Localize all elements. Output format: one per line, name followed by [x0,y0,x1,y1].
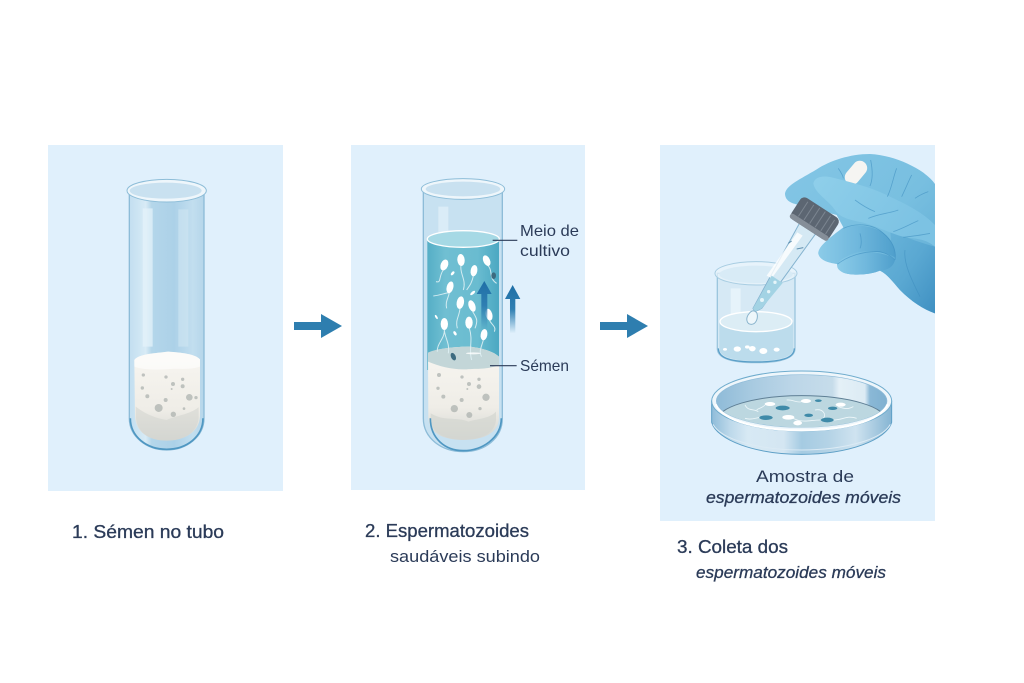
culture medium [427,239,499,370]
dish wall [712,401,892,454]
illustration: beaker and dropper [715,222,816,363]
beaker [715,262,797,363]
icon: test tube with culture medium and rising sperm [421,179,520,452]
label: culture medium [520,223,579,260]
heading: step 3: espermatozoides móveis [696,563,887,582]
sperm tails [433,265,497,360]
dropper bulb [842,158,870,188]
glove creases [837,160,930,297]
label: semen: Sémen [520,358,569,375]
heading: step 2: 2. Espermatozoides [365,521,529,541]
dropper cap [789,195,841,242]
dropper tube [747,222,816,324]
arrow: upward outside tube [505,285,520,333]
middle finger [837,252,895,275]
caption inside panel 3: Amostra de [756,467,854,486]
tube rim [421,179,505,199]
heading: step 2 [365,521,540,566]
sperm heads [434,254,494,354]
illustration: petri dish [712,371,892,454]
icon: test tube with semen [127,179,206,450]
semen sample [134,352,200,441]
medium surface [427,231,499,247]
caption inside panel 3: espermatozoides móveis [706,488,902,507]
index finger [818,226,895,263]
leader line: semen [490,364,517,367]
arrow: upward inside tube [477,281,492,330]
back of hand [785,154,935,313]
panel: step 3 background [660,145,935,521]
caption inside panel 3 [706,467,902,507]
heading: step 1: 1. Sémen no tubo [72,522,224,542]
panel: step 2 background [351,145,585,490]
tube rim [127,179,206,202]
leader line: medium [493,239,517,242]
thumb [813,176,935,247]
dish rim [712,371,892,431]
panel: step 1 background [48,145,283,491]
arrow: step 2 to 3 [600,314,648,338]
heading: step 2: saudáveis subindo [390,547,540,566]
heading: step 3 [677,537,887,582]
semen layer [428,347,499,440]
sperm in dish [745,399,857,425]
label: culture medium: Meio de [520,223,579,240]
shaded wrist [880,230,935,313]
arrow: step 1 to 2 [294,314,342,338]
illustration: gloved hand with dropper bulb and cap [785,154,935,313]
heading: step 3: 3. Coleta dos [677,537,788,557]
label: culture medium: cultivo [520,243,570,260]
liquid in dish [722,395,880,428]
